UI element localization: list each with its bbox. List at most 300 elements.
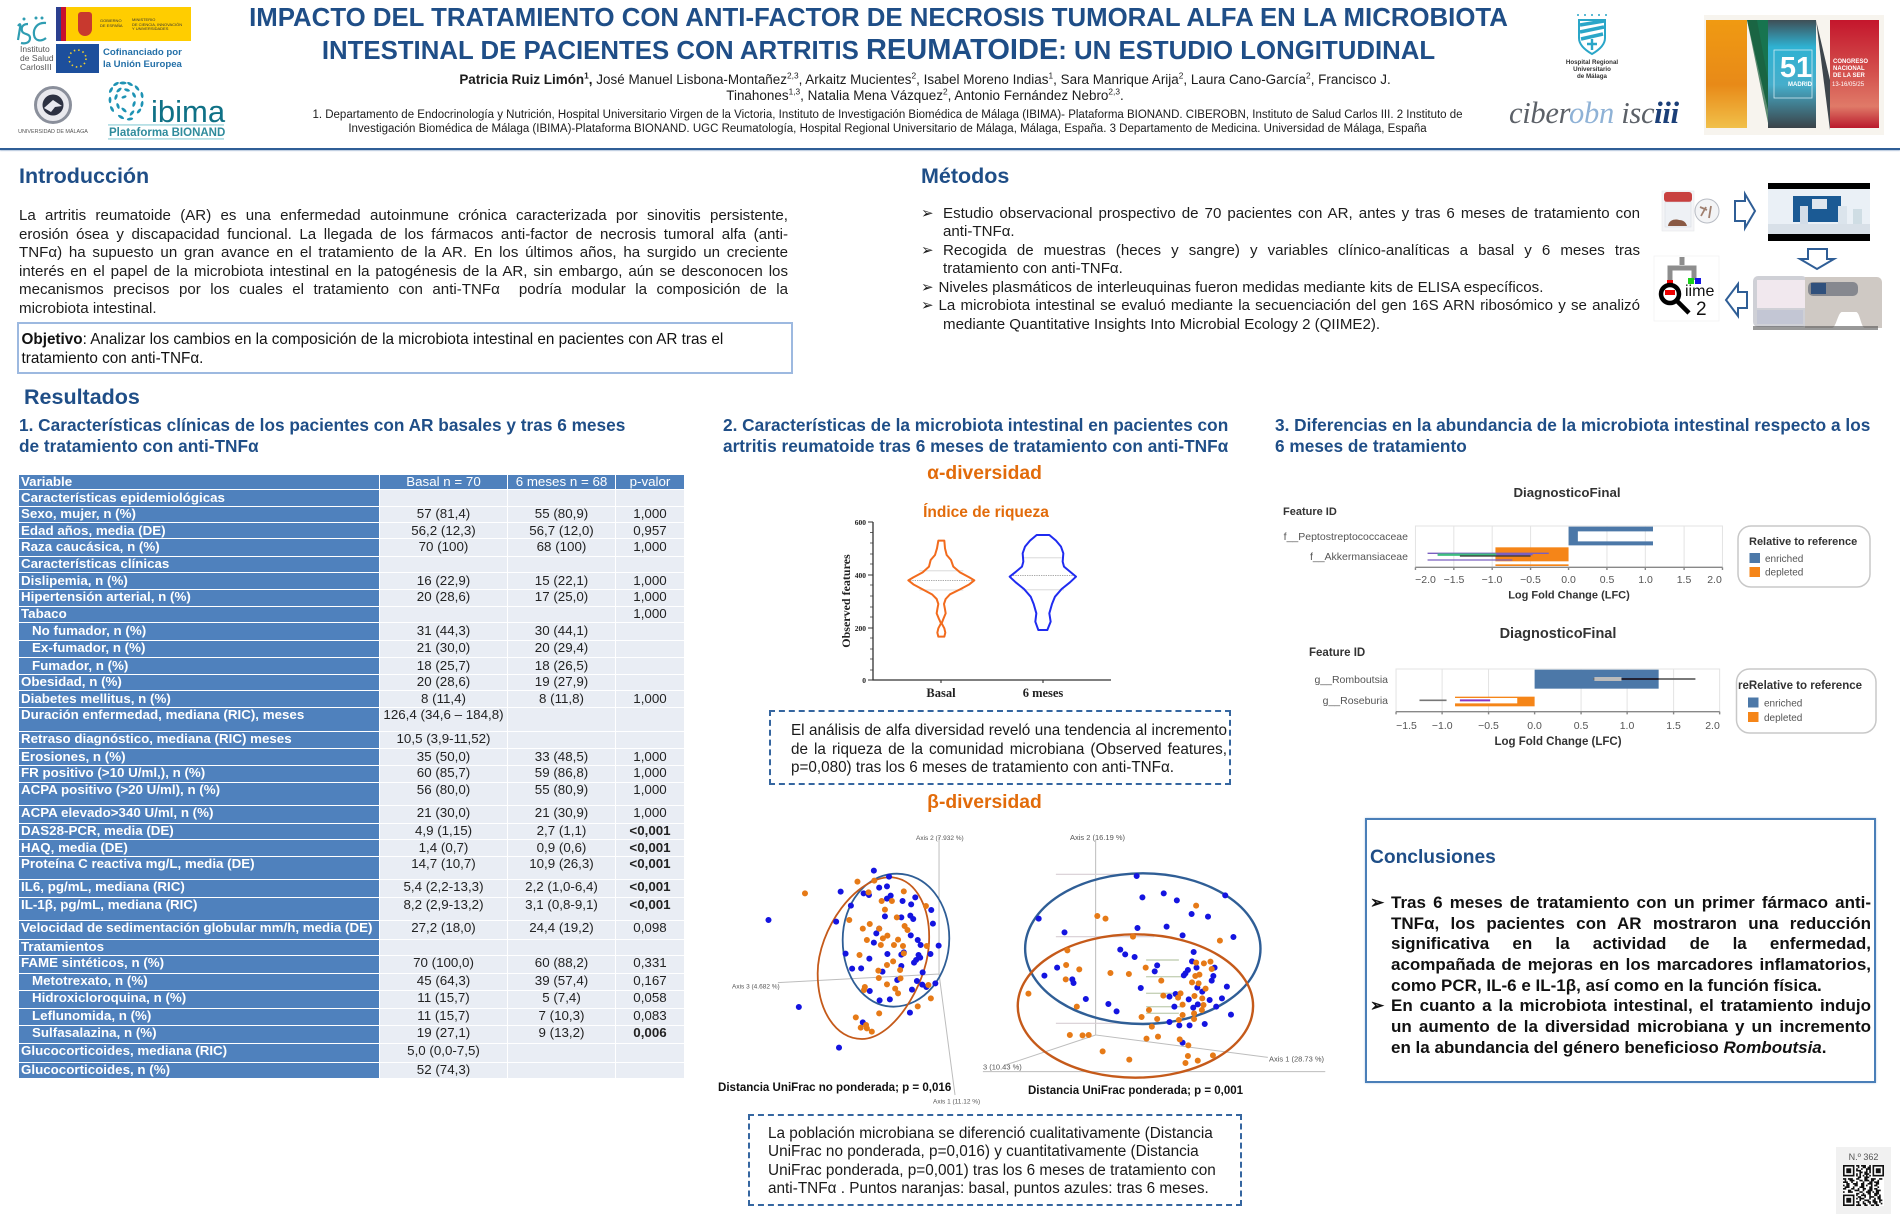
- violin: basal: [908, 541, 974, 637]
- logo: Gobierno de España ministerio: DE ESPAÑA: [100, 22, 123, 28]
- table: características clínicas: 1,000: [633, 606, 667, 621]
- callout: beta diversidad: [748, 1114, 1242, 1206]
- heading: Introducción: Introducción: [19, 164, 149, 188]
- table: características clínicas: 70 (100,0): [413, 955, 474, 970]
- table: características clínicas: Variable: [21, 474, 72, 489]
- table: características clínicas: Retraso diagnóstico, mediana (RIC) meses: [21, 731, 292, 746]
- table: características clínicas: 20 (28,6): [417, 589, 470, 604]
- legend: depleted: [1765, 568, 1803, 578]
- item: estudio: anti-TNFα.: [943, 223, 1015, 240]
- table: características clínicas: 52 (74,3): [417, 1062, 470, 1077]
- table: características clínicas: 18 (26,5): [535, 658, 588, 673]
- ellipses: [1018, 873, 1260, 1078]
- table: características clínicas: 11 (15,7): [417, 1008, 470, 1023]
- table: características clínicas: Edad años, media (DE): [21, 523, 166, 538]
- table: características clínicas: HAQ, media (DE): [21, 840, 128, 855]
- axis title: Log Fold Change (LFC): [1508, 590, 1630, 602]
- table: características clínicas: Diabetes mellitus, n (%): [21, 691, 171, 706]
- feature labels: g__Roseburia: [1323, 695, 1388, 707]
- logo: Gobierno de España ministerio: Y UNIVERSIDADES: [132, 26, 168, 31]
- logo: Instituto de Salud Carlos III: de Salud: [20, 53, 54, 63]
- text: introducción: La artritis reumatoide (AR) es una enfermedad autoinmune crónica caracterizada por sinovitis persistente,: [19, 207, 788, 224]
- text: introducción: [19, 207, 788, 316]
- logo: Hospital Regional Universitario de Málaga: [1566, 14, 1618, 80]
- table: características clínicas: FR positivo (>10 U/ml,), n (%): [21, 765, 205, 780]
- table: características clínicas: No fumador, n (%): [32, 623, 146, 638]
- item: secuenciación: ➢: [921, 297, 934, 314]
- item: interleuquinas: Niveles plasmáticos de interleuquinas fueron medidas mediante kits de ELISA específicos.: [938, 278, 1543, 296]
- tick labels: −1.5: [1396, 720, 1417, 732]
- table: características clínicas: Metotrexato, n (%): [32, 973, 148, 988]
- item: interleuquinas: ➢: [921, 278, 934, 296]
- table: características clínicas: 21 (30,0): [417, 805, 470, 820]
- image: 51 Congreso Nacional de la SER: MADRID: [1788, 82, 1813, 88]
- authors: Patricia Ruiz Limón1, José Manuel Lisbona-Montañez2,3, Arkaitz Mucientes2, Isabel Moreno Indias1, Sara Manrique Arija2, Laura Cano-García2, Francisco J.: [459, 70, 1391, 86]
- table: características clínicas: FAME sintéticos, n (%): [21, 955, 164, 970]
- tick labels: 1.5: [1666, 720, 1681, 732]
- table: características clínicas: <0,001: [629, 840, 671, 855]
- item: muestras: tratamiento con anti-TNFα.: [943, 260, 1123, 277]
- table: características clínicas: 3,1 (0,8-9,1): [525, 897, 598, 912]
- text: introducción: interés en el papel de la microbiota intestinal en la patogénesis de la AR, sin embargo, aún se desconocen los: [19, 262, 788, 280]
- table: características clínicas: Leflunomida, n (%): [32, 1008, 151, 1023]
- table: características clínicas: 0,058: [633, 990, 667, 1005]
- tick labels: 1.5: [1677, 574, 1691, 586]
- table: características clínicas: Características epidemiológicas: [21, 490, 225, 505]
- feature id label: Feature ID: [1309, 647, 1365, 659]
- chart title: DiagnosticoFinal: [1500, 626, 1616, 642]
- table: características clínicas: 1,000: [633, 765, 667, 780]
- table: características clínicas: 55 (80,9): [535, 782, 588, 797]
- affiliations: Investigación Biomédica de Málaga (IBIMA)-Plataforma BIONAND. UGC Reumatología, Hospital Regional Universitario de Málaga, Málaga, España. 3 Departamento de Medicina. Universidad de Málaga, España: [348, 123, 1427, 135]
- table: características clínicas: Características clínicas: [21, 556, 169, 571]
- table: características clínicas: 60 (85,7): [417, 765, 470, 780]
- callout: beta diversidad: UniFrac no ponderada, p=0,016) y cuantitativamente (Distancia: [768, 1143, 1199, 1160]
- list: conclusiones: significativa en la actividad de la enfermedad,: [1391, 934, 1871, 953]
- table: características clínicas: 24,4 (19,2): [529, 920, 594, 935]
- table: características clínicas: 126,4 (34,6 – 184,8): [383, 707, 504, 722]
- table: características clínicas: Glucocorticoides, n (%): [21, 1062, 170, 1077]
- table: características clínicas: 0,167: [633, 973, 667, 988]
- icon: QIIME 2 logo: [1654, 256, 1719, 321]
- arrow: to sequencer: [1800, 249, 1834, 269]
- table: características clínicas: 1,000: [633, 539, 667, 554]
- item: estudio: Estudio observacional prospectivo de 70 pacientes con AR, antes y tras 6 meses de tratamiento con: [943, 204, 1640, 222]
- title: [249, 4, 1508, 66]
- points: basal: [805, 881, 931, 1032]
- logo: Hospital Regional Universitario de Málaga: Universitario: [1573, 66, 1611, 73]
- table: características clínicas: Duración enfermedad, mediana (RIC), meses: [21, 707, 304, 722]
- plot area: [1396, 669, 1720, 714]
- heading: Métodos: Métodos: [921, 164, 1009, 188]
- table: características clínicas: 4,9 (1,15): [415, 823, 472, 838]
- table: características clínicas: p-valor: [630, 474, 670, 489]
- table: características clínicas: 1,000: [633, 748, 667, 764]
- table: características clínicas: 16 (22,9): [417, 573, 470, 588]
- title: INTESTINAL DE PACIENTES CON ARTRITIS REUMATOIDE: UN ESTUDIO LONGITUDINAL: [322, 34, 1435, 66]
- heading: sección 3: [1275, 415, 1870, 456]
- logo: Gobierno de España ministerio: GOBIERNO: [100, 18, 122, 23]
- table: características clínicas: DAS28-PCR, media (DE): [21, 823, 174, 838]
- table: características clínicas: 31 (44,3): [417, 623, 470, 638]
- list: conclusiones: un aumento de la diversidad microbiana y un incremento: [1391, 1017, 1871, 1036]
- heading: sección 3: 6 meses de tratamiento: [1275, 436, 1467, 456]
- callout: alfa diversidad: El análisis de alfa diversidad reveló una tendencia al incremento: [791, 722, 1227, 739]
- table: características clínicas: 5 (7,4): [542, 990, 581, 1005]
- list: conclusiones: en la abundancia del género beneficioso Romboutsia.: [1391, 1038, 1826, 1057]
- table: características clínicas: ACPA positivo (>20 U/ml), n (%): [21, 782, 220, 797]
- image: 51 Congreso Nacional de la SER: CONGRESO: [1833, 59, 1868, 65]
- feature id label: Feature ID: [1283, 506, 1337, 518]
- table: características clínicas: 55 (80,9): [535, 506, 588, 521]
- table: características clínicas: 11 (15,7): [417, 990, 470, 1005]
- callout: beta diversidad: anti-TNFα . Puntos naranjas: basal, puntos azules: tras 6 meses.: [768, 1180, 1209, 1197]
- table: características clínicas: 8 (11,4): [421, 691, 466, 706]
- list: conclusiones: como PCR, IL-6 e IL-1β, así como en la función física.: [1391, 976, 1822, 995]
- table: características clínicas: 9 (13,2): [538, 1025, 584, 1040]
- table: características clínicas: 1,000: [633, 589, 667, 604]
- heading: Conclusiones: Conclusiones: [1370, 846, 1496, 868]
- table: características clínicas: 10,9 (26,3): [529, 856, 594, 871]
- item: secuenciación: mediante Quantitative Insights Into Microbial Ecology 2 (QIIME2).: [943, 316, 1380, 332]
- item: estudio: ➢: [921, 204, 934, 222]
- chart: LFC género: [1309, 626, 1877, 748]
- chart: PCoA unifrac ponderada: [982, 833, 1326, 1079]
- table: características clínicas: 33 (48,5): [535, 748, 588, 764]
- caption: UniFrac no ponderada: Distancia UniFrac no ponderada; p = 0,016: [718, 1082, 951, 1094]
- logo: ibima Plataforma BIONAND: ibima: [151, 94, 226, 129]
- table: características clínicas: 0,098: [633, 920, 667, 935]
- table: características clínicas: 17 (25,0): [535, 589, 588, 604]
- heading: β-diversidad: β-diversidad: [927, 792, 1042, 813]
- image: 51 Congreso Nacional de la SER: DE LA SER: [1833, 73, 1865, 79]
- axis labels: [839, 518, 1063, 700]
- table: características clínicas: 2,2 (1,0-6,4): [525, 879, 598, 894]
- legend: enriched: [1765, 554, 1803, 565]
- chart: LFC familia: [1283, 485, 1871, 602]
- callout: objetivo: tratamiento con anti-TNFα.: [22, 350, 203, 366]
- heading: sección 2: [723, 415, 1228, 456]
- axis labels: Observed features: [839, 554, 853, 648]
- table: características clínicas: <0,001: [629, 879, 671, 894]
- logo: Hospital Regional Universitario de Málaga: Hospital Regional: [1566, 59, 1618, 66]
- axis labels: Axis 2 (16.19 %): [1070, 833, 1126, 842]
- table: características clínicas: 0,331: [633, 955, 667, 970]
- table: características clínicas: <0,001: [629, 856, 671, 871]
- table: características clínicas: Velocidad de sedimentación globular mm/h, media (DE): [21, 920, 372, 935]
- table: características clínicas: 1,000: [633, 573, 667, 588]
- table: características clínicas: 8,2 (2,9-13,2): [403, 897, 484, 912]
- tick labels: 0.5: [1600, 574, 1614, 586]
- table: características clínicas: 19 (27,1): [417, 1025, 470, 1040]
- logo: Universidad de Málaga: [18, 86, 88, 135]
- tick labels: 1.0: [1620, 720, 1634, 732]
- table: características clínicas: 0,006: [633, 1025, 667, 1040]
- axis labels: Axis 2 (7.932 %): [916, 835, 964, 842]
- callout: objetivo: [17, 322, 793, 374]
- table: características clínicas: 0,083: [633, 1008, 667, 1023]
- axes: [983, 840, 1325, 1072]
- tick labels: 0.5: [1574, 720, 1588, 732]
- ellipses: [818, 874, 949, 1039]
- authors: Tinahones1,3, Natalia Mena Vázquez2, Antonio Fernández Nebro2,3.: [726, 87, 1124, 103]
- axis labels: 3 (10.43 %): [983, 1062, 1022, 1072]
- table: características clínicas: Tratamientos: [21, 939, 104, 954]
- table: características clínicas: 1,000: [633, 805, 667, 820]
- table: características clínicas: 8 (11,8): [539, 691, 584, 706]
- callout: beta diversidad: La población microbiana se diferenció cualitativamente (Distancia: [768, 1124, 1213, 1142]
- table: características clínicas: Sexo, mujer, n (%): [21, 506, 136, 521]
- heading: sección 1: [19, 415, 625, 456]
- caption: UniFrac ponderada: Distancia UniFrac ponderada; p = 0,001: [1028, 1085, 1243, 1097]
- tick labels: −1.0: [1482, 574, 1503, 586]
- table: características clínicas: 5,4 (2,2-13,3): [403, 879, 484, 894]
- table: características clínicas: 2,7 (1,1): [537, 823, 586, 838]
- logo: Instituto de Salud Carlos III: [16, 16, 54, 72]
- title: IMPACTO DEL TRATAMIENTO CON ANTI-FACTOR DE NECROSIS TUMORAL ALFA EN LA MICROBIOTA: [249, 4, 1508, 32]
- image: 51 Congreso Nacional de la SER: 51: [1780, 52, 1812, 84]
- table: características clínicas: 59 (86,8): [535, 765, 588, 780]
- feature labels: g__Romboutsia: [1314, 674, 1388, 686]
- table: características clínicas: Proteína C reactiva mg/L, media (DE): [21, 856, 255, 871]
- list: conclusiones: ➢: [1370, 893, 1384, 912]
- header rule: [0, 148, 1900, 150]
- item: muestras: Recogida de muestras (heces y sangre) y variables clínico-analíticas a basal y 6 meses tras: [943, 242, 1640, 258]
- legend: [1736, 669, 1876, 733]
- callout: alfa diversidad: de la riqueza de la comunidad microbiana (Observed features,: [791, 740, 1227, 758]
- icon: sample jar: [1662, 191, 1719, 231]
- axis labels: 0: [862, 676, 866, 685]
- table: características clínicas: 5,0 (0,0-7,5): [407, 1043, 480, 1058]
- heading: sección 2: 2. Características de la microbiota intestinal en pacientes con: [723, 415, 1228, 435]
- affiliations: [312, 109, 1463, 135]
- table: características clínicas: Hidroxicloroquina, n (%): [32, 990, 186, 1005]
- list: métodos: [921, 204, 1640, 332]
- table: características clínicas: 56,7 (12,0): [529, 523, 594, 538]
- icon: QIIME 2 logo: 2: [1696, 299, 1707, 320]
- logo: Instituto de Salud Carlos III: Instituto: [20, 44, 50, 54]
- legend: depleted: [1764, 713, 1802, 724]
- text: Cofinanciado por la Unión Europea: [103, 47, 182, 70]
- item: muestras: [921, 242, 1640, 277]
- list: conclusiones: ➢: [1370, 996, 1384, 1015]
- item: secuenciación: La microbiota intestinal se evaluó mediante la secuenciación del gen 16S ARN ribosómico y se analizó: [938, 297, 1640, 314]
- axis labels: 400: [855, 571, 866, 580]
- table: características clínicas: Tabaco: [21, 606, 67, 621]
- arrow: to kit: [1735, 194, 1755, 228]
- icon: QR code: [1843, 1165, 1884, 1206]
- list: conclusiones: [1370, 893, 1871, 1057]
- legend: [1738, 526, 1870, 587]
- table: características clínicas: Dislipemia, n (%): [21, 573, 128, 588]
- legend: Relative to reference: [1749, 536, 1857, 548]
- tick labels: −1.0: [1432, 720, 1453, 732]
- logo: ibima Plataforma BIONAND: Plataforma BIONAND: [109, 127, 225, 139]
- tick labels: 0.0: [1527, 720, 1542, 732]
- text: poster number: N.º 362: [1849, 1152, 1878, 1162]
- chart: PCoA unifrac no ponderada: [732, 835, 980, 1106]
- arrow: to QIIME: [1726, 284, 1747, 316]
- table: características clínicas: Hipertensión arterial, n (%): [21, 589, 191, 604]
- table: características clínicas: 14,7 (10,7): [411, 856, 476, 871]
- item: estudio: [921, 204, 1640, 240]
- header: logos left: [16, 7, 226, 140]
- logo: Universidad de Málaga: UNIVERSIDAD DE MÁLAGA: [18, 128, 88, 135]
- axis labels: 200: [855, 624, 866, 633]
- heading: sección 1: de tratamiento con anti-TNFα: [19, 436, 259, 456]
- table: características clínicas: 56,2 (12,3): [411, 523, 476, 538]
- table: características clínicas: 1,000: [633, 782, 667, 797]
- heading: Resultados: Resultados: [24, 385, 140, 409]
- table: características clínicas: Raza caucásica, n (%): [21, 539, 160, 554]
- callout: objetivo: Objetivo: Analizar los cambios en la composición de la microbiota intestinal en pacientes con AR tras el: [22, 331, 723, 348]
- panel: conclusiones: [1365, 818, 1876, 1083]
- table: características clínicas: 1,4 (0,7): [419, 840, 468, 855]
- axis labels: Axis 3 (4.682 %): [732, 984, 780, 990]
- points: basal: [1028, 906, 1220, 1063]
- tick labels: −2.0: [1415, 574, 1436, 586]
- tick labels: −1.5: [1444, 574, 1465, 586]
- tick labels: 2.0: [1707, 574, 1722, 586]
- legend: enriched: [1764, 698, 1802, 710]
- heading: sección 2: artritis reumatoide tras 6 meses de tratamiento con anti-TNFα: [723, 436, 1228, 456]
- table: características clínicas: 70 (100): [419, 539, 468, 554]
- table: características clínicas: 6 meses n = 68: [516, 474, 607, 489]
- feature labels: f__Peptostreptococcaceae: [1284, 531, 1408, 543]
- axes: [868, 522, 1111, 683]
- callout: alfa diversidad: [769, 710, 1231, 785]
- badge: poster number and QR: [1836, 1147, 1891, 1214]
- table: características clínicas: 27,2 (18,0): [411, 920, 476, 935]
- logo: Unión Europea flag: [56, 44, 99, 73]
- table: características clínicas: 19 (27,9): [535, 674, 588, 689]
- table: características clínicas: [19, 474, 684, 1078]
- axis labels: 600: [855, 518, 866, 527]
- text: Cofinanciado por la Unión Europea: Cofinanciado por: [103, 47, 182, 58]
- table: características clínicas: 35 (50,0): [417, 748, 470, 764]
- chart title: DiagnosticoFinal: [1513, 485, 1621, 500]
- table: características clínicas: <0,001: [629, 823, 671, 838]
- table: características clínicas: 60 (88,2): [535, 955, 588, 970]
- workflow icons: métodos: [1654, 183, 1882, 330]
- table: características clínicas: 56 (80,0): [417, 782, 470, 797]
- table: características clínicas: 0,957: [633, 523, 667, 538]
- image: 51 Congreso Nacional de la SER: [1704, 15, 1884, 135]
- icon: QIIME 2 logo: iime: [1685, 283, 1714, 300]
- tick labels: [1415, 574, 1722, 586]
- feature labels: [1284, 531, 1408, 563]
- text: introducción: mecanismos precisos por los cuales el tratamiento con anti-TNFα podría modular la composición de la: [19, 281, 788, 298]
- table: características clínicas: 15 (22,1): [535, 573, 588, 588]
- logo: Gobierno de España ministerio: DE CIENCIA, INNOVACIÓN: [132, 22, 182, 26]
- table: características clínicas: 30 (44,1): [535, 623, 588, 638]
- callout: beta diversidad: UniFrac ponderada, p=0,001) tras los 6 meses de tratamiento con: [768, 1162, 1216, 1178]
- table: características clínicas: 45 (64,3): [417, 973, 470, 988]
- tick labels: [1396, 720, 1720, 732]
- axis labels: Basal: [926, 686, 956, 700]
- table: características clínicas: 20 (28,6): [417, 674, 470, 689]
- item: secuenciación: [921, 297, 1640, 332]
- authors: [459, 70, 1391, 103]
- heading: sección 1: 1. Características clínicas de los pacientes con AR basales y tras 6 meses: [19, 415, 625, 435]
- axis labels: 6 meses: [1023, 686, 1063, 700]
- table: características clínicas: 1,000: [633, 506, 667, 521]
- logo: Instituto de Salud Carlos III: CarlosIII: [20, 62, 52, 72]
- axis labels: Axis 1 (28.73 %): [1269, 1054, 1325, 1064]
- table: características clínicas: IL6, pg/mL, mediana (RIC): [21, 879, 185, 894]
- axis labels: [732, 835, 980, 1106]
- points: 6 meses: [1039, 876, 1233, 1043]
- table: características clínicas: 57 (81,4): [417, 506, 470, 521]
- image: 51 Congreso Nacional de la SER: NACIONAL: [1833, 66, 1865, 72]
- axis labels: [983, 833, 1325, 1072]
- list: conclusiones: acompañada de mejoras en los marcadores inflamatorios,: [1391, 955, 1871, 974]
- table: características clínicas: ACPA elevado>340 U/ml, n (%): [21, 805, 213, 820]
- chart: violin observed features: [839, 518, 1111, 700]
- table: características clínicas: Basal n = 70: [406, 474, 481, 489]
- table: características clínicas: Sulfasalazina, n (%): [32, 1025, 157, 1040]
- feature labels: [1314, 674, 1388, 707]
- logo: Gobierno de España ministerio: MINISTERIO: [132, 17, 155, 22]
- logo: Gobierno de España ministerio: [56, 7, 191, 41]
- axes: [778, 837, 955, 1095]
- axis title: Log Fold Change (LFC): [1494, 736, 1622, 748]
- table: características clínicas: 21 (30,9): [535, 805, 588, 820]
- plot area: [1415, 526, 1722, 570]
- item: muestras: ➢: [921, 242, 934, 258]
- affiliations: 1. Departamento de Endocrinología y Nutrición, Hospital Universitario Virgen de la Victoria, Instituto de Investigación Biomédica de Málaga (IBIMA)- Plataforma BIONAND. CIBEROBN, Instituto de Salud Carlos III. 2 Instituto de: [312, 109, 1463, 121]
- heading: α-diversidad: α-diversidad: [927, 462, 1042, 484]
- table: características clínicas: Ex-fumador, n (%): [32, 640, 145, 655]
- text: introducción: erosión ósea y discapacidad funcional. La llegada de los fármacos anti-factor de necrosis tumoral alfa (anti-: [19, 226, 788, 242]
- table: características clínicas: 18 (25,7): [417, 658, 470, 673]
- table: características clínicas: Obesidad, n (%): [21, 674, 122, 689]
- points: 6 meses: [768, 871, 939, 1048]
- image: 51 Congreso Nacional de la SER: 13-16/05/25: [1832, 82, 1865, 88]
- text: introducción: microbiota intestinal.: [19, 300, 157, 316]
- table: características clínicas: 1,000: [633, 691, 667, 706]
- list: conclusiones: TNFα, los pacientes con AR mostraron una reducción: [1391, 914, 1871, 933]
- heading: Índice de riqueza: Índice de riqueza: [923, 504, 1049, 521]
- table: características clínicas: Erosiones, n (%): [21, 748, 126, 764]
- logo: ciberobn iscii: ciberobn isciii: [1509, 96, 1679, 130]
- tick labels: −0.5: [1520, 574, 1541, 586]
- table: características clínicas: <0,001: [629, 897, 671, 912]
- table: características clínicas: 7 (10,3): [538, 1008, 584, 1023]
- heading: sección 3: 3. Diferencias en la abundancia de la microbiota intestinal respecto a los: [1275, 415, 1870, 435]
- image: sequencer: [1744, 274, 1882, 333]
- feature labels: f__Akkermansiaceae: [1310, 551, 1408, 563]
- list: conclusiones: En cuanto a la microbiota intestinal, el tratamiento indujo: [1391, 996, 1871, 1015]
- tick labels: −0.5: [1478, 720, 1499, 732]
- table: características clínicas: 0,9 (0,6): [537, 840, 586, 855]
- legend: reRelative to reference: [1738, 680, 1862, 692]
- logo: ibima Plataforma BIONAND: [108, 82, 226, 140]
- table: características clínicas: 39 (57,4): [535, 973, 588, 988]
- table: características clínicas: 20 (29,4): [535, 640, 588, 655]
- table: características clínicas: 68 (100): [537, 539, 586, 554]
- tick labels: 2.0: [1705, 720, 1720, 732]
- table: características clínicas: Glucocorticoides, mediana (RIC): [21, 1043, 227, 1058]
- table: características clínicas: IL-1β, pg/mL, mediana (RIC): [21, 897, 197, 912]
- table: características clínicas: 10,5 (3,9-11,52): [397, 731, 490, 746]
- table: características clínicas: 21 (30,0): [417, 640, 470, 655]
- logo: Hospital Regional Universitario de Málaga: de Málaga: [1577, 73, 1608, 80]
- callout: alfa diversidad: p=0,080) tras los 6 meses de tratamiento con anti-TNFα.: [791, 759, 1174, 776]
- list: conclusiones: Tras 6 meses de tratamiento con un primer fármaco anti-: [1391, 893, 1871, 912]
- axis labels: Axis 1 (11.12 %): [933, 1098, 980, 1106]
- text: Cofinanciado por la Unión Europea: la Unión Europea: [103, 59, 182, 70]
